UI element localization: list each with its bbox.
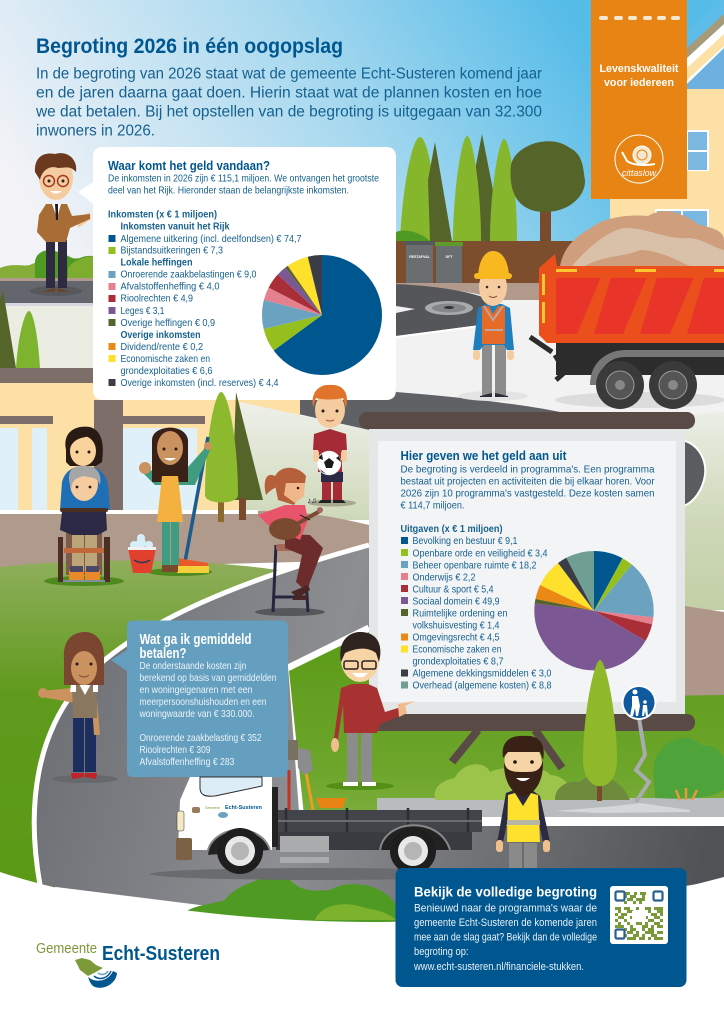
spending legend xyxy=(400,523,552,692)
spending legend: Overhead (algemene kosten) € 8,8 xyxy=(412,680,552,692)
full budget text: mee aan de slag gaat? Bekijk dan de volledige xyxy=(414,932,597,944)
spending legend: Beheer openbare ruimte € 18,2 xyxy=(412,560,537,572)
payment explanation: woningwaarde van € 330.000. xyxy=(139,708,254,720)
person: girl with ukulele on stool xyxy=(255,468,325,616)
payment explanation: en woningeigenaren met een xyxy=(140,684,253,696)
payment explanation: De onderstaande kosten zijn xyxy=(140,660,247,672)
payment explanation xyxy=(139,660,277,720)
logo: Gemeente Echt-Susteren: Gemeente xyxy=(36,941,97,957)
income legend: Algemene uitkering (incl. deelfondsen) € 74,7 xyxy=(120,233,302,245)
spending legend: Uitgaven (x € 1 miljoen) xyxy=(400,523,502,535)
bushes bottom xyxy=(178,878,396,925)
intro paragraph: we dat betalen. Bij het opstellen van de begroting is uitgegaan van 32.300 xyxy=(35,104,542,120)
income legend: Inkomsten vanuit het Rijk xyxy=(120,220,230,232)
panel: average payment xyxy=(111,620,288,777)
worker with helmet xyxy=(458,251,528,401)
bushes behind the pavement xyxy=(435,738,724,800)
full budget text: gemeente Echt-Susteren de komende jaren xyxy=(414,917,597,929)
person: boy with football xyxy=(308,385,356,506)
title: Begroting 2026 in één oogopslag xyxy=(36,35,343,58)
heading: payment: Wat ga ik gemiddeld xyxy=(140,632,252,648)
income intro text: deel van het Rijk. Hieronder staan de belangrijkste inkomsten. xyxy=(108,184,349,196)
fence and wheelie bins: RESTAFVAL xyxy=(409,255,431,259)
income intro text xyxy=(108,172,379,196)
pie chart: income xyxy=(292,285,352,345)
QR code xyxy=(610,886,668,944)
income legend: Overige inkomsten (incl. reserves) € 4,4 xyxy=(120,377,279,389)
income intro text: De inkomsten in 2026 zijn € 115,1 miljoen. We ontvangen het grootste xyxy=(108,172,379,184)
curved asphalt road xyxy=(34,545,724,930)
spending legend: volkshuisvesting € 1,4 xyxy=(412,620,500,632)
road with manhole, upper right xyxy=(240,283,724,430)
person: woman with broom xyxy=(139,428,212,576)
heading: income: Waar komt het geld vandaan? xyxy=(108,158,270,173)
trees behind the fence xyxy=(396,134,585,243)
spending legend: Sociaal domein € 49,9 xyxy=(412,596,500,608)
orange banner xyxy=(591,0,687,199)
pavement and curb xyxy=(377,798,724,826)
pie chart: spending xyxy=(564,581,624,641)
dirt heap xyxy=(560,211,724,266)
panel: view full budget xyxy=(396,868,686,987)
payment explanation: berekend op basis van gemiddelden xyxy=(140,672,277,684)
banner text: voor iedereen xyxy=(604,77,674,89)
heading: spending: Hier geven we het geld aan uit xyxy=(400,448,567,463)
trees in the middle xyxy=(205,392,263,522)
spending legend: grondexploitaties € 8,7 xyxy=(412,656,504,668)
house on the left xyxy=(0,383,300,515)
spending legend: Algemene dekkingsmiddelen € 3,0 xyxy=(412,668,552,680)
full budget text: www.echt-susteren.nl/financiele-stukken. xyxy=(413,961,584,973)
full budget text: Benieuwd naar de programma's waar de xyxy=(414,902,597,914)
icon: pedestrian road sign xyxy=(555,685,690,813)
board legs xyxy=(452,730,562,768)
income legend: Overige heffingen € 0,9 xyxy=(120,317,215,329)
person: man in brown jacket xyxy=(30,153,91,296)
income legend: Leges € 3,1 xyxy=(120,305,165,317)
white municipal truck xyxy=(150,740,490,880)
background sky xyxy=(0,0,724,300)
icon: logo emblem xyxy=(75,958,117,988)
fence and wheelie bins xyxy=(396,241,582,284)
heading: payment xyxy=(140,632,252,662)
income legend: Economische zaken en xyxy=(120,353,210,365)
brown paving xyxy=(0,510,724,700)
truck logo xyxy=(205,805,263,818)
payment amounts xyxy=(140,732,262,768)
spending intro text: De begroting is verdeeld in programma's. Een programma xyxy=(400,464,655,476)
payment amounts: Afvalstoffenheffing € 283 xyxy=(140,756,235,768)
road piece right of the board xyxy=(682,440,705,506)
spending intro text: € 114,7 miljoen. xyxy=(400,500,464,512)
intro paragraph: inwoners in 2026. xyxy=(36,122,155,140)
person: bearded man in yellow vest xyxy=(496,736,550,870)
income legend: Rioolrechten € 4,9 xyxy=(120,292,193,304)
spending intro text xyxy=(400,464,655,512)
tools on the truck xyxy=(288,740,346,810)
person: girl with ukulele on stool: ♪♫ xyxy=(307,496,317,505)
spending legend: Omgevingsrecht € 4,5 xyxy=(412,632,500,644)
banner text: Levenskwaliteit xyxy=(600,63,679,75)
spending intro text: bestaat uit projecten en activiteiten die bij elkaar horen. Voor xyxy=(400,476,655,488)
intro paragraph: In de begroting van 2026 staat wat de gemeente Echt-Susteren komend jaar xyxy=(36,66,542,82)
income legend: Inkomsten (x € 1 miljoen) xyxy=(108,208,217,220)
house on the right xyxy=(610,0,724,279)
income legend: Onroerende zaakbelastingen € 9,0 xyxy=(120,268,257,280)
payment amounts: Onroerende zaakbelasting € 352 xyxy=(140,732,262,744)
intro paragraph xyxy=(35,66,542,140)
icon: bucket with foam xyxy=(128,534,156,573)
logo: Gemeente Echt-Susteren: Echt-Susteren xyxy=(102,943,220,965)
full budget text xyxy=(413,902,597,973)
fence and wheelie bins: GFT xyxy=(446,255,453,259)
middle pale ground xyxy=(240,402,724,610)
person: woman in vest xyxy=(38,632,118,783)
income legend: Afvalstoffenheffing € 4,0 xyxy=(120,280,220,292)
grass field on the left xyxy=(0,561,290,895)
person: pointing man with glasses xyxy=(326,632,415,790)
payment amounts: Rioolrechten € 309 xyxy=(140,744,211,756)
right lawn xyxy=(289,632,724,825)
payment explanation: meerpersoonshuishouden en een xyxy=(140,696,267,708)
spending legend: Economische zaken en xyxy=(412,644,502,656)
spending legend: Ruimtelijke ordening en xyxy=(412,608,508,620)
tall tree in front of the board xyxy=(583,660,617,801)
income legend: Lokale heffingen xyxy=(120,256,192,268)
truck logo: Echt-Susteren xyxy=(225,805,263,811)
banner text xyxy=(600,63,679,89)
logo: Gemeente Echt-Susteren xyxy=(36,941,220,988)
board xyxy=(359,412,695,731)
heading: payment: betalen? xyxy=(140,646,187,662)
icon: cittaslow snail xyxy=(615,135,663,183)
icon: cittaslow snail: cittaslow xyxy=(622,168,656,178)
spending legend: Bevolking en bestuur € 9,1 xyxy=(412,535,518,547)
income legend xyxy=(108,208,302,389)
panel: income xyxy=(78,147,396,400)
spending intro text: 2026 zijn 10 programma's vastgesteld. Deze kosten samen xyxy=(400,488,655,500)
left street with bushes xyxy=(0,250,96,383)
white bottom curve xyxy=(0,872,724,1024)
person: man pushing wheelchair with elderly man xyxy=(44,427,124,586)
spending legend: Onderwijs € 2,2 xyxy=(412,572,476,584)
full budget text: begroting op: xyxy=(414,946,468,958)
red dump truck xyxy=(530,254,724,409)
heading: full budget: Bekijk de volledige begroting xyxy=(414,884,597,900)
income legend: Overige inkomsten xyxy=(120,329,200,341)
truck logo: Gemeente xyxy=(205,805,221,810)
intro paragraph: en de jaren daarna gaat doen. Hierin staat wat de plannen kosten en hoe xyxy=(36,84,542,102)
spending legend: Cultuur & sport € 5,4 xyxy=(412,584,494,596)
income legend: grondexploitaties € 6,6 xyxy=(120,365,213,377)
income legend: Dividend/rente € 0,2 xyxy=(120,341,203,353)
spending legend: Openbare orde en veiligheid € 3,4 xyxy=(412,548,548,560)
income legend: Bijstandsuitkeringen € 7,3 xyxy=(120,244,223,256)
